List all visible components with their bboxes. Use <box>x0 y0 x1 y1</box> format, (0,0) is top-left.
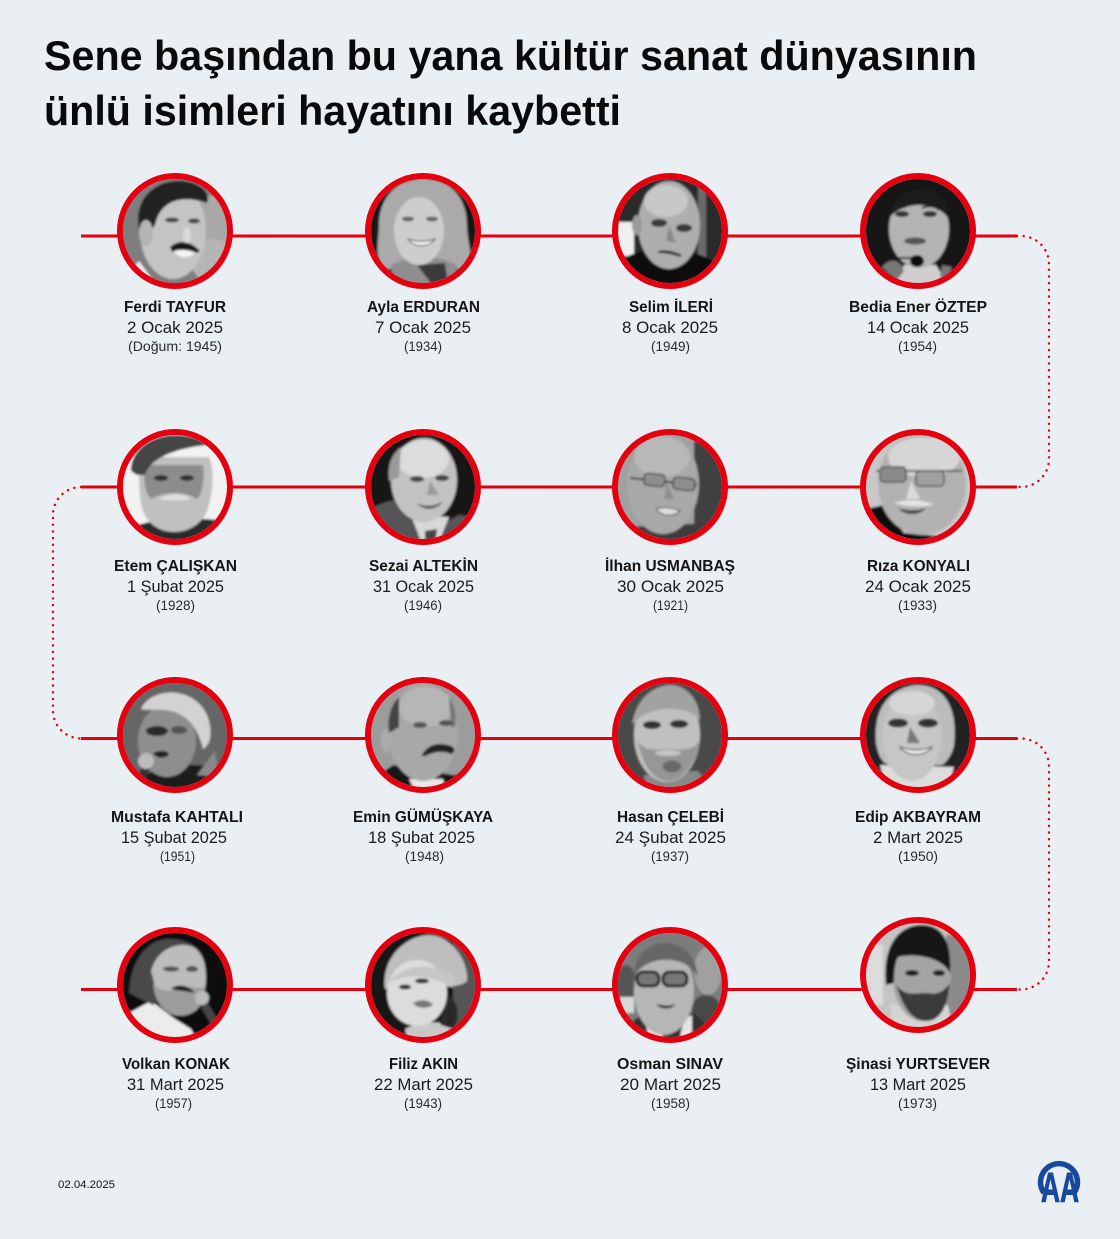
caption: Edip Akbayram: (1950) <box>898 849 938 864</box>
caption: Emin Gümüşkaya: (1948) <box>405 849 444 864</box>
person: Sezai Altekin <box>368 432 478 613</box>
caption: Bedia Ener Öztep <box>849 297 987 354</box>
person: Edip Akbayram <box>855 680 981 864</box>
caption: Bedia Ener Öztep: (1954) <box>898 339 937 354</box>
portrait: Hasan Çelebi <box>615 680 725 795</box>
caption: Ferdi Tayfur: (Doğum: 1945) <box>128 339 222 354</box>
portrait: Rıza Konyalı <box>863 432 973 547</box>
caption: Mustafa Kahtalı: 15 Şubat 2025 <box>121 829 227 847</box>
title: ünlü isimleri hayatını kaybetti <box>44 87 621 134</box>
person: Ayla Erduran <box>367 176 480 354</box>
portrait: Sezai Altekin <box>368 432 478 547</box>
caption: Selim İleri: Selim İLERİ <box>629 298 713 316</box>
caption: Filiz Akın: 22 Mart 2025 <box>374 1076 473 1094</box>
portrait: Filiz Akın <box>368 930 478 1045</box>
caption: Hasan Çelebi: 24 Şubat 2025 <box>615 829 726 847</box>
person: Bedia Ener Öztep <box>849 176 987 354</box>
caption: Rıza Konyalı: 24 Ocak 2025 <box>865 578 971 596</box>
portrait: Osman Sınav <box>615 930 725 1045</box>
caption: Sezai Altekin: (1946) <box>404 598 442 613</box>
person: Hasan Çelebi <box>615 680 726 864</box>
caption: Selim İleri <box>622 298 718 354</box>
caption: Şinasi Yurtsever <box>846 1056 990 1111</box>
caption: İlhan Usmanbaş: (1921) <box>653 598 688 613</box>
caption: Filiz Akın: (1943) <box>404 1096 442 1111</box>
person: Filiz Akın <box>368 930 478 1111</box>
timeline connector <box>53 236 1049 990</box>
caption: Etem Çalışkan: Etem ÇALIŞKAN <box>114 558 237 575</box>
caption: Sezai Altekin: 31 Ocak 2025 <box>373 578 474 596</box>
date stamp: 02.04.2025 <box>58 1179 115 1191</box>
caption: Hasan Çelebi <box>615 808 726 864</box>
person: Ferdi Tayfur <box>120 176 235 354</box>
caption: Şinasi Yurtsever: Şinasi YURTSEVER <box>846 1056 990 1073</box>
person: Selim İleri <box>615 176 725 354</box>
caption: Şinasi Yurtsever: (1973) <box>898 1096 937 1111</box>
caption: Ferdi Tayfur <box>124 299 226 354</box>
portrait: Volkan Konak <box>120 930 230 1045</box>
caption: Rıza Konyalı <box>865 558 971 613</box>
caption: Sezai Altekin <box>369 557 478 613</box>
person: İlhan Usmanbaş <box>605 432 735 613</box>
person: Şinasi Yurtsever <box>846 920 990 1111</box>
person: Rıza Konyalı <box>863 432 973 613</box>
person: Osman Sınav <box>615 930 725 1111</box>
portrait: Mustafa Kahtalı <box>120 680 230 795</box>
caption: Emin Gümüşkaya: Emin GÜMÜŞKAYA <box>353 807 493 826</box>
caption: Bedia Ener Öztep: Bedia Ener ÖZTEP <box>849 297 987 316</box>
person: Etem Çalışkan <box>114 432 237 613</box>
portrait: Ayla Erduran <box>368 176 478 291</box>
caption: Edip Akbayram <box>855 809 981 864</box>
caption: Osman Sınav: 20 Mart 2025 <box>620 1076 721 1094</box>
caption: Edip Akbayram: 2 Mart 2025 <box>873 829 963 847</box>
caption: Volkan Konak <box>122 1056 230 1111</box>
caption: Ayla Erduran: Ayla ERDURAN <box>367 299 480 316</box>
person: Volkan Konak <box>120 930 230 1111</box>
caption: Ferdi Tayfur: 2 Ocak 2025 <box>127 319 223 337</box>
portrait: Edip Akbayram <box>863 680 973 795</box>
caption: Volkan Konak: (1957) <box>155 1096 192 1111</box>
caption: Emin Gümüşkaya: 18 Şubat 2025 <box>368 829 475 847</box>
caption: Selim İleri: (1949) <box>651 339 690 354</box>
caption: İlhan Usmanbaş <box>605 557 735 613</box>
caption: Hasan Çelebi: (1937) <box>651 849 689 864</box>
caption: Emin Gümüşkaya <box>353 807 493 864</box>
caption: Etem Çalışkan: (1928) <box>156 598 195 613</box>
portrait: Etem Çalışkan <box>120 432 230 547</box>
portrait: Bedia Ener Öztep <box>863 176 973 291</box>
caption: Şinasi Yurtsever: 13 Mart 2025 <box>870 1076 966 1094</box>
caption: Filiz Akın <box>374 1056 473 1111</box>
caption: Filiz Akın: Filiz AKIN <box>389 1056 458 1073</box>
caption: Volkan Konak: 31 Mart 2025 <box>127 1076 224 1094</box>
caption: Etem Çalışkan <box>114 558 237 613</box>
caption: Rıza Konyalı: Rıza KONYALI <box>867 558 970 575</box>
portrait: İlhan Usmanbaş <box>615 432 726 547</box>
caption: Bedia Ener Öztep: 14 Ocak 2025 <box>867 319 969 337</box>
caption: Sezai Altekin: Sezai ALTEKİN <box>369 557 478 575</box>
caption: İlhan Usmanbaş: İlhan USMANBAŞ <box>605 557 735 575</box>
caption: Osman Sınav: Osman SINAV <box>617 1056 723 1073</box>
person: Mustafa Kahtalı <box>111 680 243 864</box>
caption: Mustafa Kahtalı: Mustafa KAHTALI <box>111 809 243 826</box>
caption: Rıza Konyalı: (1933) <box>898 598 937 613</box>
title: Sene başından bu yana kültür sanat dünyasının <box>44 32 977 79</box>
caption: Ferdi Tayfur: Ferdi TAYFUR <box>124 299 226 316</box>
caption: Ayla Erduran: 7 Ocak 2025 <box>375 319 471 337</box>
caption: Osman Sınav: (1958) <box>651 1096 690 1111</box>
caption: Edip Akbayram: Edip AKBAYRAM <box>855 809 981 826</box>
caption: Ayla Erduran <box>367 299 480 354</box>
portrait: Selim İleri <box>615 176 725 291</box>
caption: Mustafa Kahtalı: (1951) <box>160 849 195 864</box>
caption: Volkan Konak: Volkan KONAK <box>122 1056 230 1073</box>
portrait: Emin Gümüşkaya <box>368 680 478 795</box>
caption: Hasan Çelebi: Hasan ÇELEBİ <box>617 808 724 826</box>
caption: Selim İleri: 8 Ocak 2025 <box>622 319 718 337</box>
person: Emin Gümüşkaya <box>353 680 493 864</box>
caption: Etem Çalışkan: 1 Şubat 2025 <box>127 578 224 596</box>
caption: Ayla Erduran: (1934) <box>404 339 442 354</box>
portrait: Ferdi Tayfur <box>120 176 235 291</box>
icon: AA logo <box>1040 1164 1079 1211</box>
caption: Mustafa Kahtalı <box>111 809 243 864</box>
title <box>44 32 977 134</box>
caption: İlhan Usmanbaş: 30 Ocak 2025 <box>617 578 724 596</box>
icon: AA logo: AA <box>1041 1164 1079 1211</box>
portrait: Şinasi Yurtsever <box>863 920 973 1035</box>
caption: Osman Sınav <box>617 1056 723 1111</box>
